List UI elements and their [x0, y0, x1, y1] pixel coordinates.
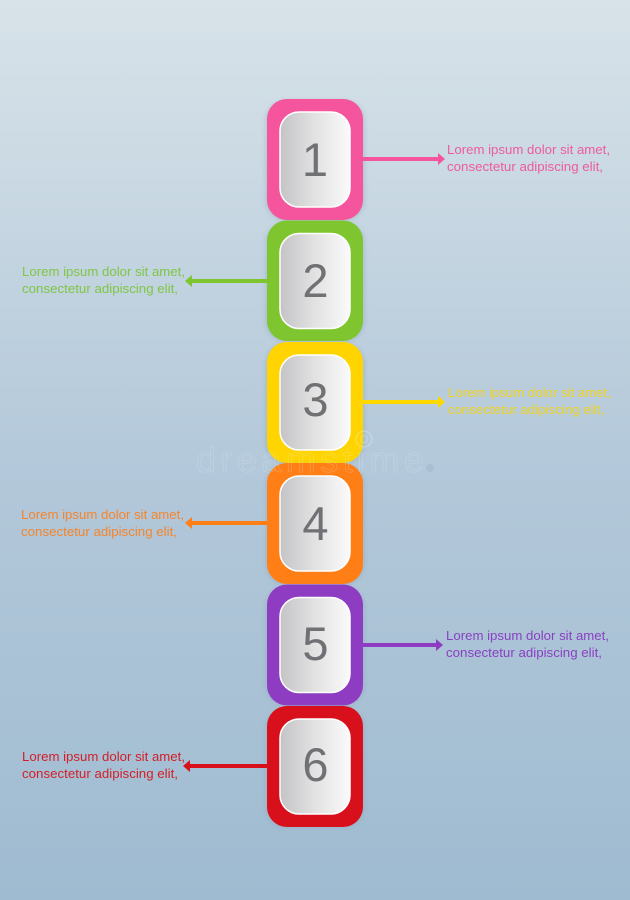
arrow 5: [362, 639, 443, 651]
step 1: pink: [265, 99, 610, 221]
arrow 6: [183, 760, 268, 772]
tile 1: [267, 99, 363, 220]
arrow 1: [362, 153, 445, 165]
number 5: 5: [302, 617, 329, 670]
label 1: consectetur adipiscing elit,: [447, 159, 603, 174]
label 6: Lorem ipsum dolor sit amet,: [22, 749, 185, 764]
label 6: consectetur adipiscing elit,: [22, 766, 178, 781]
step 6: red: [22, 706, 365, 828]
label 5: consectetur adipiscing elit,: [446, 645, 602, 660]
label 5: Lorem ipsum dolor sit amet,: [446, 628, 609, 643]
label 2: [22, 264, 185, 296]
watermark: dreamstime: [196, 439, 424, 480]
label 5: [446, 628, 609, 660]
tile 2: [267, 220, 363, 341]
label 2: consectetur adipiscing elit,: [22, 281, 178, 296]
label 4: consectetur adipiscing elit,: [21, 524, 177, 539]
key 6: [280, 719, 350, 814]
label 1: Lorem ipsum dolor sit amet,: [447, 142, 610, 157]
step 3: yellow: [265, 342, 611, 464]
label 4: Lorem ipsum dolor sit amet,: [21, 507, 184, 522]
label 3: [448, 385, 611, 417]
arrow 4: [185, 517, 268, 529]
number 1: 1: [302, 133, 328, 186]
key 2: [280, 234, 350, 328]
tile 5: [267, 584, 363, 706]
label 3: consectetur adipiscing elit,: [448, 402, 604, 417]
arrow 3: [362, 396, 445, 408]
label 2: Lorem ipsum dolor sit amet,: [22, 264, 185, 279]
key 1: [280, 112, 350, 207]
number 4: 4: [302, 497, 329, 550]
step 4: orange: [21, 463, 365, 585]
tile 6: [267, 706, 363, 827]
tile 3: [267, 342, 363, 463]
label 1: [447, 142, 610, 174]
label 6: [22, 749, 185, 781]
step 2: green: [22, 220, 365, 342]
label 4: [21, 507, 184, 539]
label 3: Lorem ipsum dolor sit amet,: [448, 385, 611, 400]
step 5: purple: [265, 584, 609, 706]
number 2: 2: [302, 254, 329, 307]
key 4: [280, 476, 350, 571]
key 3: [280, 355, 350, 450]
key 5: [280, 598, 350, 692]
arrow 2: [185, 275, 268, 287]
number 3: 3: [302, 373, 329, 426]
tile 4: [267, 463, 363, 584]
number 6: 6: [302, 738, 329, 791]
